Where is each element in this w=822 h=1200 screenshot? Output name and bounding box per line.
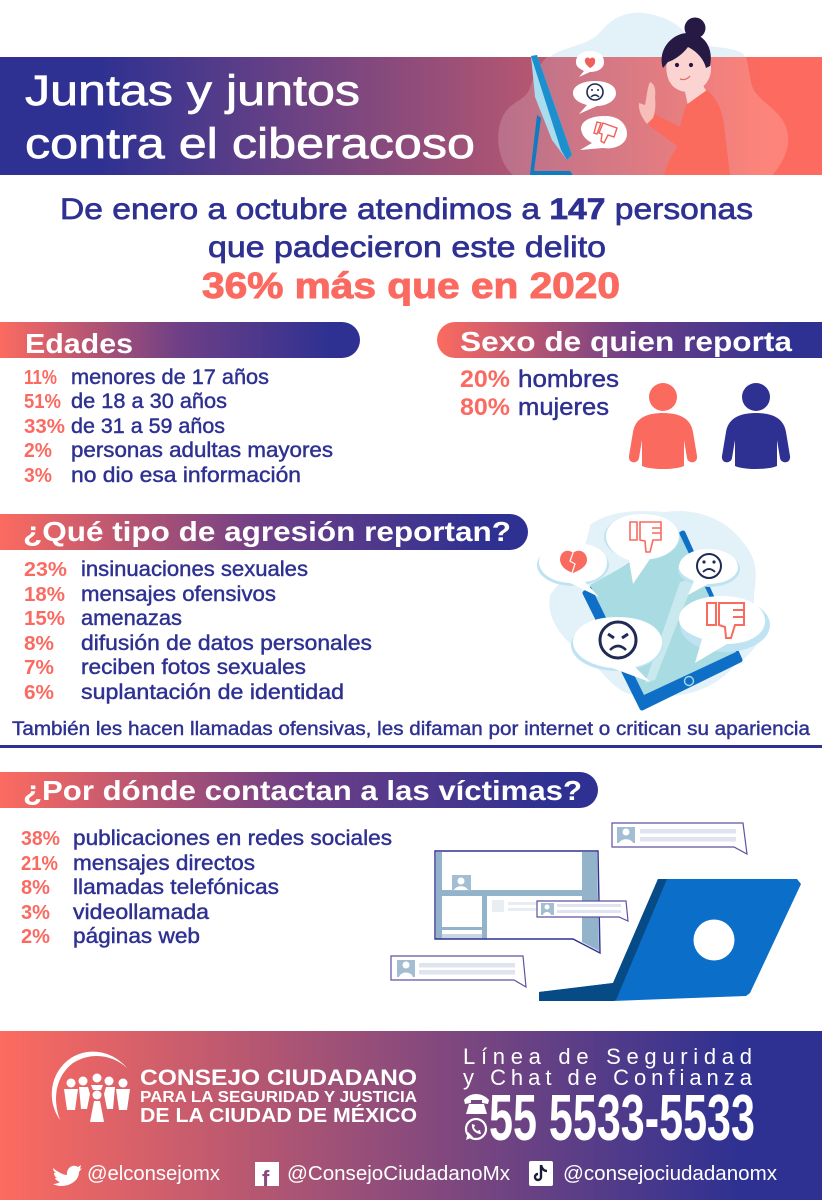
organization name: CONSEJO CIUDADANO: [140, 1065, 417, 1090]
sex list: mujeres: [518, 394, 609, 421]
age list: 11%: [24, 367, 57, 389]
channel list: 38%: [21, 828, 60, 850]
cloud overlay: [498, 57, 788, 175]
header banner: [0, 13, 822, 175]
social: facebook: f: [262, 1166, 270, 1191]
heading bar: Sexo de quien reporta: [460, 326, 792, 357]
icon: woman character: [639, 18, 730, 175]
illustration cloud backdrop: [498, 13, 788, 175]
hotline: Línea de Seguridad: [463, 1044, 752, 1069]
age list: 33%: [24, 416, 65, 438]
age list: 3%: [24, 465, 52, 487]
channel list: mensajes directos: [73, 852, 255, 875]
age list: 2%: [24, 440, 52, 462]
age list: [24, 366, 333, 487]
age list: personas adultas mayores: [71, 439, 333, 462]
small chat message: [537, 901, 628, 921]
icon: message bubbles: [573, 51, 627, 150]
channel list: 8%: [21, 877, 50, 899]
logo mark: [52, 1052, 130, 1122]
channel list: llamadas telefónicas: [73, 876, 279, 899]
panel: contacto: [0, 772, 801, 1001]
aggression list: 6%: [24, 682, 54, 704]
bubble: thumbs down large: [679, 596, 770, 663]
aggression list: reciben fotos sexuales: [81, 656, 306, 679]
aggression list: 23%: [24, 559, 67, 581]
hotline: [463, 1044, 755, 1154]
bubble: broken heart: [537, 543, 609, 597]
social: facebook: @ConsejoCiudadanoMx: [287, 1163, 510, 1185]
title: contra el ciberacoso: [25, 120, 475, 168]
icon: person coral: [629, 383, 697, 469]
channel list: páginas web: [73, 925, 200, 948]
aggression list: 7%: [24, 657, 54, 679]
bubble: angry face: [571, 617, 663, 682]
sex list: 80%: [460, 394, 510, 421]
icon: laptop with chat windows: [391, 823, 801, 1001]
social: tiktok: @consejociudadanomx: [563, 1163, 777, 1185]
organization name: DE LA CIUDAD DE MÉXICO: [140, 1104, 417, 1127]
aggression list: difusión de datos personales: [81, 632, 372, 655]
bubble: thumbs down: [604, 514, 680, 584]
aggression list: 15%: [24, 608, 65, 630]
aggression list: 8%: [24, 633, 54, 655]
top chat message: [612, 823, 747, 854]
banner gradient: [0, 57, 822, 175]
big window: [435, 851, 600, 953]
channel list: publicaciones en redes sociales: [73, 827, 392, 850]
heading bar: ¿Qué tipo de agresión reportan?: [23, 516, 511, 547]
heading bar: Edades: [25, 328, 133, 359]
footer: [0, 1031, 822, 1200]
icon: computer monitor: [530, 55, 573, 175]
organization name: PARA LA SEGURIDAD Y JUSTICIA: [140, 1089, 417, 1106]
bubble: sad face: [678, 549, 740, 595]
organization name: [140, 1065, 417, 1127]
age list: de 18 a 30 años: [71, 390, 227, 413]
channel list: 21%: [21, 853, 58, 875]
icon: phone with reaction bubbles: [537, 511, 770, 708]
icon: whatsapp: [466, 1119, 486, 1140]
channel list: 3%: [21, 902, 50, 924]
aggression list: insinuaciones sexuales: [81, 558, 308, 581]
aggression list: [24, 558, 372, 704]
channel list: 2%: [21, 926, 50, 948]
social: twitter: @elconsejomx: [87, 1163, 220, 1185]
headline stat: 36% más que en 2020: [202, 265, 620, 306]
social: facebook: [255, 1162, 510, 1191]
intro text: [60, 193, 753, 306]
aggression list: suplantación de identidad: [81, 681, 344, 704]
footer background: [0, 1031, 822, 1200]
sex list: [460, 366, 619, 421]
laptop: [539, 879, 801, 1001]
intro text: De enero a octubre atendimos a 147 personas: [60, 193, 753, 226]
age list: de 31 a 59 años: [71, 415, 225, 438]
heading bar: [0, 322, 360, 359]
channel list: videollamada: [73, 901, 209, 924]
channel list: [21, 827, 392, 948]
note text: También les hacen llamadas ofensivas, les difaman por internet o critican su apariencia: [12, 719, 810, 740]
hotline: y Chat de Confianza: [463, 1065, 753, 1090]
intro text: que padecieron este delito: [208, 231, 606, 264]
age list: menores de 17 años: [71, 366, 269, 389]
sex list: hombres: [518, 366, 619, 393]
panel: tipo de agresión: [0, 511, 810, 740]
aggression list: amenazas: [81, 607, 182, 630]
title: Juntas y juntos: [25, 67, 360, 115]
age list: 51%: [24, 391, 61, 413]
sex list: 20%: [460, 366, 510, 393]
heading bar: ¿Por dónde contactan a las víctimas?: [23, 775, 582, 806]
icon: telephone: [464, 1094, 489, 1114]
aggression list: mensajes ofensivos: [81, 583, 276, 606]
panel: sexo: [437, 322, 822, 469]
title: [25, 67, 475, 168]
aggression list: 18%: [24, 584, 65, 606]
icon: person navy: [722, 383, 790, 469]
age list: no dio esa información: [71, 464, 301, 487]
heading bar: [437, 322, 822, 358]
panel: edades: [0, 322, 360, 487]
bottom chat message: [391, 956, 526, 987]
